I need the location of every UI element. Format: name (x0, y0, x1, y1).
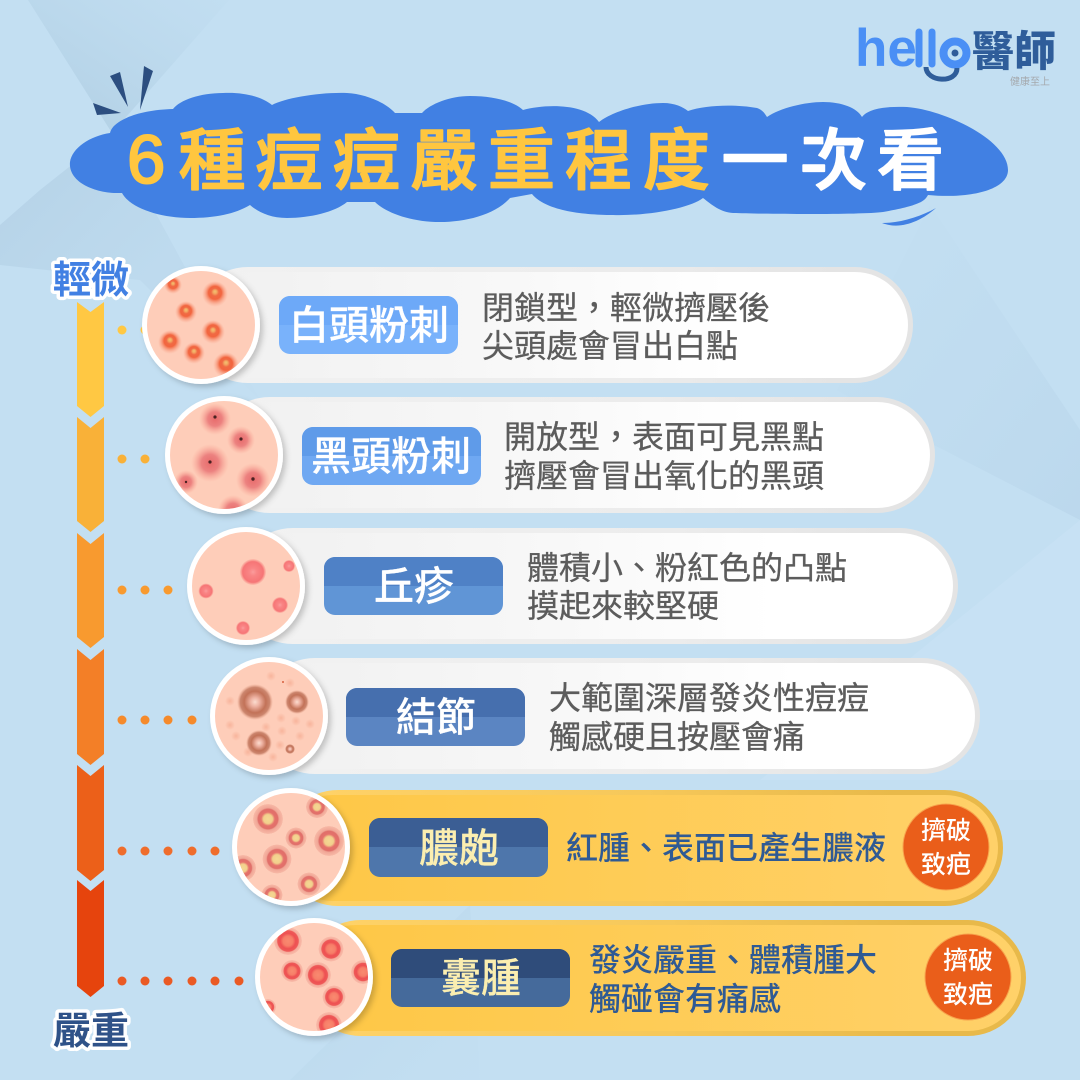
title text: 6 (127, 121, 165, 198)
skin icon: blackhead (165, 396, 283, 525)
logo: hello醫師: 醫師 (972, 28, 1056, 75)
title cloud (70, 93, 1008, 222)
panel: pustule (230, 788, 1003, 906)
badge: pustule scarring warning: 擠破 (921, 817, 971, 845)
description: whitehead: 尖頭處會冒出白點 (482, 328, 738, 364)
description: cyst (589, 942, 877, 1017)
badge: cyst scarring warning: 擠破 (943, 947, 993, 975)
tag: whitehead (279, 296, 458, 354)
skin icon: nodule (210, 657, 328, 775)
description: blackhead: 開放型，表面可見黑點 (504, 419, 824, 455)
panel: cyst (255, 918, 1026, 1038)
description: papule: 體積小、粉紅色的凸點 (527, 550, 847, 586)
severity arrow scale (77, 302, 104, 997)
connector dots (118, 326, 244, 986)
label: mild: 輕微 (53, 260, 129, 302)
title text: 一次看 (722, 124, 944, 199)
tag: cyst (391, 949, 570, 1007)
badge: cyst scarring warning (925, 934, 1011, 1020)
skin icon: whitehead (142, 266, 260, 384)
description: whitehead (482, 290, 770, 364)
tag: whitehead: 白頭粉刺 (289, 304, 449, 348)
badge: pustule scarring warning (903, 804, 989, 890)
logo: hello醫師 (855, 19, 1056, 88)
tag: nodule (346, 688, 525, 746)
tag: pustule: 膿皰 (419, 827, 499, 871)
logo: hello醫師: 健康至上 (1010, 75, 1050, 88)
skin icon: papule (187, 527, 305, 645)
description: papule: 摸起來較堅硬 (527, 588, 719, 624)
badge: pustule scarring warning: 致疤 (921, 851, 971, 879)
title sparks (93, 66, 153, 115)
skin icon: cyst (255, 918, 375, 1038)
tag: blackhead: 黑頭粉刺 (311, 435, 471, 479)
description: cyst: 發炎嚴重、體積腫大 (589, 942, 877, 978)
description: blackhead: 擠壓會冒出氧化的黑頭 (504, 458, 824, 494)
panel: whitehead (142, 266, 913, 384)
tag: papule: 丘疹 (374, 565, 454, 609)
tag: blackhead (302, 427, 481, 485)
title text: 種痘痘嚴重程度 (178, 124, 710, 199)
logo: hello醫師: he (855, 19, 917, 78)
description: blackhead (504, 419, 824, 494)
title text (127, 121, 944, 199)
panel: blackhead (165, 396, 935, 525)
panel: nodule (210, 657, 980, 775)
description: papule (527, 550, 847, 624)
tag: papule (324, 557, 503, 615)
skin icon: pustule (230, 788, 350, 906)
tag: pustule (369, 818, 548, 877)
description: pustule: 紅腫、表面已產生膿液 (566, 830, 886, 866)
panel: papule (187, 527, 958, 645)
tag: nodule: 結節 (396, 696, 476, 740)
tag: cyst: 囊腫 (441, 957, 521, 1001)
badge: cyst scarring warning: 致疤 (943, 981, 993, 1009)
description: nodule (549, 680, 869, 755)
description: nodule: 大範圍深層發炎性痘痘 (549, 680, 869, 716)
description: nodule: 觸感硬且按壓會痛 (549, 719, 805, 755)
description: whitehead: 閉鎖型，輕微擠壓後 (482, 290, 770, 326)
title swoosh (882, 208, 936, 226)
description: cyst: 觸碰會有痛感 (589, 981, 781, 1017)
label: severe: 嚴重 (53, 1011, 129, 1053)
